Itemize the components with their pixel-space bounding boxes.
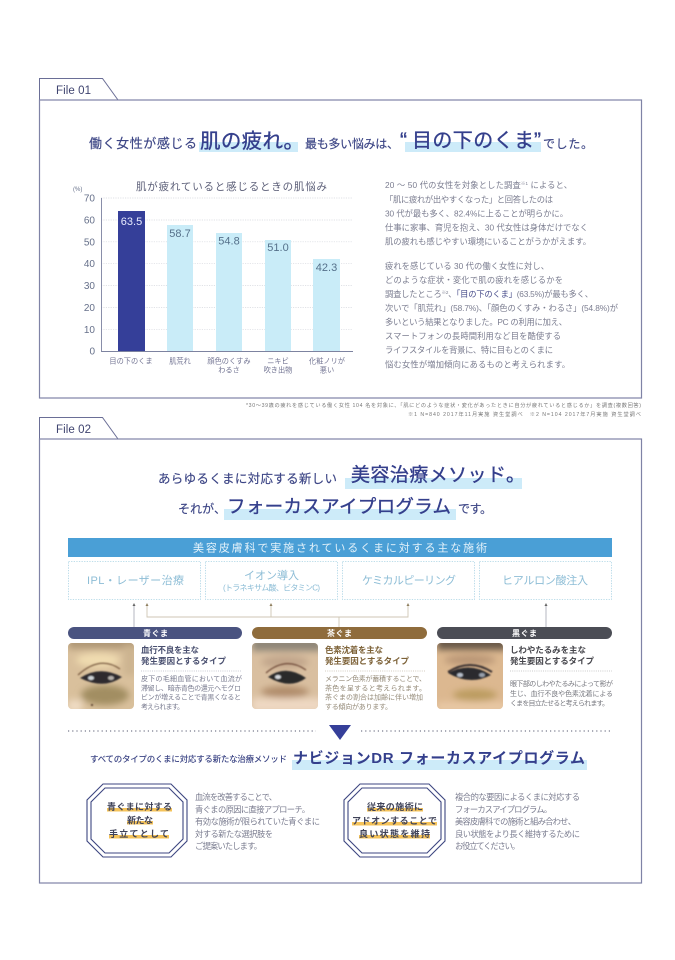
- callout: option for blue circles: [87, 784, 320, 857]
- arrow: black circles to hyaluronic acid: [544, 603, 548, 627]
- heading: 美容治療メソッド。: [351, 464, 525, 486]
- type description: くまを目立たせると考えられます。: [510, 698, 609, 708]
- text block: survey explanation: 多いという結果となりました。PC の利用に加え、: [385, 317, 567, 327]
- footnotes: ※1 N=840 2017年11月実施 資生堂調べ ※2 N=104 2017年7月実施 資生堂調べ: [408, 410, 641, 418]
- text block: survey explanation: スマートフォンの長時間利用など目を酷使する: [385, 331, 561, 341]
- footnotes: [246, 401, 641, 418]
- tab: File 02: [40, 418, 118, 439]
- column: black circles: [437, 627, 613, 712]
- treatment box: hyaluronic acid: ヒアルロン酸注入: [502, 573, 588, 587]
- text block: survey explanation: 30 代が最も多く、82.4%に上ることが明らかに。: [385, 208, 568, 218]
- heading: ”: [534, 129, 541, 152]
- callout text: 複合的な要因によるくまに対応する: [455, 792, 580, 802]
- type title: [510, 645, 594, 666]
- arrow: blue circles to IPL: [132, 603, 136, 627]
- callout text: 青ぐまの原因に直接アプローチ。: [195, 804, 310, 814]
- badge text: 手立てとして: [109, 828, 169, 839]
- heading: 働く女性が感じる: [89, 136, 197, 151]
- label pill: [252, 627, 427, 639]
- y axis labels: [84, 194, 95, 358]
- bar values: [121, 216, 337, 274]
- type description: 眼下部のしわやたるみによって影が: [510, 679, 613, 688]
- text block: survey explanation: ライフスタイルを背景に、特に目もとのくまに: [385, 345, 553, 355]
- callout: add-on to existing treatments: [344, 784, 580, 857]
- panel frame: [40, 100, 642, 398]
- callout text: [195, 792, 320, 851]
- panel: File 02: [40, 418, 642, 883]
- heading: “: [400, 129, 407, 152]
- y axis labels: 0: [89, 347, 95, 358]
- treatment box: iontophoresis: (トラネキサム酸、ビタミンC): [223, 582, 320, 592]
- type description: メラニン色素が蓄積することで、: [325, 674, 426, 683]
- treatment header bar: [68, 538, 612, 557]
- category labels: 吹き出物: [264, 366, 292, 374]
- text block: survey explanation: ※2: [442, 290, 449, 295]
- text block: survey explanation: 悩む女性が増加傾向にあるものと考えられます。: [385, 360, 570, 370]
- y axis labels: 50: [84, 237, 95, 248]
- type description: 茶色を呈すると考えられます。: [325, 683, 426, 692]
- category labels: 肌荒れ: [169, 356, 191, 366]
- text block: survey explanation: 仕事に家事、育児を抱え、30 代女性は身体だけでなく: [385, 222, 588, 232]
- column: brown circles: [252, 627, 427, 712]
- tab: File 02: File 02: [56, 424, 91, 436]
- treatment box: iontophoresis: イオン導入: [244, 568, 299, 582]
- category labels: [109, 356, 345, 374]
- bar values: 54.8: [218, 236, 240, 248]
- badge text: 青ぐまに対する: [107, 801, 172, 812]
- type description: 茶ぐまの割合は加齢に伴い増加: [325, 693, 423, 702]
- heading: です。: [458, 502, 492, 516]
- text block: survey explanation: 20 ～ 50 代の女性を対象とした調査: [385, 180, 521, 190]
- type description: [141, 674, 242, 711]
- type description: 考えられます。: [141, 703, 184, 711]
- type description: 滞留し、暗赤青色の還元ヘモグロ: [141, 683, 241, 692]
- category labels: わるさ: [218, 366, 240, 374]
- infographic page: [38, 78, 642, 884]
- photo: eye with blue circle: [68, 643, 134, 709]
- treatment box: chemical peeling: ケミカルピーリング: [362, 573, 456, 587]
- badge text: 良い状態を維持: [359, 828, 430, 839]
- badge text: [352, 801, 437, 839]
- heading: あらゆるくまに対応する新しい: [158, 472, 337, 486]
- callout text: フォーカスアイプログラム。: [455, 804, 552, 814]
- panel: File 01: [40, 78, 642, 398]
- chart title: 肌が疲れていると感じるときの肌悩み: [136, 180, 327, 193]
- bar values: 63.5: [121, 216, 142, 228]
- type title: 発生要因とするタイプ: [141, 656, 226, 666]
- program heading: [90, 749, 587, 770]
- treatment box: hyaluronic acid: [480, 562, 612, 600]
- photo: eye with black circle: [437, 643, 503, 709]
- unit label: (%): [73, 187, 82, 193]
- label pill: [437, 627, 612, 639]
- footnotes: *30～39歳の疲れを感じている働く女性 104 名を対象に、「肌にどのような症状・変化があったときに自分が疲れていると感じるか」を調査(複数回答): [246, 401, 641, 409]
- label pill: [68, 627, 242, 639]
- treatment header bar: 美容皮膚科で実施されているくまに対する主な施術: [193, 540, 487, 554]
- text block: survey explanation: どのような症状・変化で肌の疲れを感じるかを: [385, 275, 563, 285]
- category labels: 顔色のくすみ: [207, 356, 251, 366]
- bar values: 42.3: [316, 262, 337, 274]
- tab: File 01: File 01: [56, 85, 91, 97]
- arrows: brown circles to treatments: [146, 603, 410, 627]
- type description: [325, 674, 426, 711]
- badge text: アドオンすることで: [352, 816, 437, 826]
- type description: ビンが増えることで青黒くなると: [141, 693, 241, 702]
- program heading: ナビジョンDR フォーカスアイプログラム: [293, 749, 585, 767]
- label pill: 茶ぐま: [327, 628, 352, 638]
- treatment box: iontophoresis: [206, 562, 338, 600]
- type title: 色素沈着を主な: [325, 645, 383, 655]
- type description: 生じ、血行不良や色素沈着による: [510, 689, 613, 698]
- y axis labels: 40: [84, 259, 95, 270]
- type title: 発生要因とするタイプ: [325, 656, 409, 666]
- label pill: 黒ぐま: [512, 629, 537, 638]
- text block: survey explanation: 次いで「肌荒れ」(58.7%)、「顔色のくすみ・わるさ」(54.8%)が: [385, 303, 619, 313]
- tab: File 01: [40, 78, 118, 100]
- text block: survey explanation: ※1: [521, 181, 528, 186]
- y axis labels: 30: [84, 281, 95, 292]
- heading: 肌の疲れ。: [200, 130, 304, 153]
- text block: survey explanation: 肌の疲れも感じやすい環境にいることがうかがえます。: [385, 236, 591, 246]
- photo: eye with brown circle: [252, 643, 318, 709]
- category labels: 化粧ノリが: [309, 356, 345, 366]
- axes: [102, 198, 353, 352]
- program heading: すべてのタイプのくまに対応する新たな治療メソッド: [90, 754, 287, 764]
- y axis labels: 20: [84, 303, 95, 314]
- heading: [158, 464, 525, 520]
- text block: survey explanation: 「目の下のくま」(63.5%)が最も多く、: [456, 289, 593, 299]
- callout text: お役立てください。: [455, 841, 520, 851]
- heading: [89, 129, 593, 153]
- callout text: 有効な施術が限られていた青ぐまに: [195, 816, 320, 826]
- type title: [141, 645, 226, 666]
- treatment box: IPL: [68, 562, 200, 600]
- callout text: 血流を改善することで、: [195, 792, 277, 802]
- badge: double octagon: [344, 784, 445, 857]
- callout text: [455, 792, 580, 851]
- y axis labels: 70: [84, 194, 95, 204]
- type title: 血行不良を主な: [141, 645, 199, 655]
- label pill: 青ぐま: [143, 628, 168, 638]
- type title: 発生要因とするタイプ: [510, 656, 594, 666]
- callout text: 対する新たな選択肢を: [195, 829, 273, 839]
- badge: double octagon: [87, 784, 187, 857]
- heading: 最も多い悩みは、: [305, 137, 399, 151]
- y axis labels: 10: [84, 325, 95, 336]
- heading: フォーカスアイプログラム: [227, 496, 451, 517]
- callout text: ご提案いたします。: [195, 841, 262, 851]
- text block: survey explanation: 疲れを感じている 30 代の働く女性に対し、: [385, 261, 549, 271]
- bar values: 51.0: [267, 242, 289, 254]
- callout text: 良い状態をより長く維持するために: [455, 829, 580, 839]
- text block: survey explanation: 「肌に疲れが出やすくなった」と回答したのは: [385, 194, 553, 204]
- badge text: 従来の施術に: [367, 801, 423, 812]
- treatment box: IPL: IPL・レーザー治療: [87, 573, 184, 587]
- divider with down arrow: [68, 725, 612, 740]
- bar values: 58.7: [169, 228, 191, 240]
- heading: それが、: [178, 501, 226, 516]
- type title: [325, 645, 409, 666]
- text block: survey explanation: 、: [448, 289, 456, 299]
- text block: survey explanation: によると、: [528, 180, 572, 190]
- category labels: 悪い: [320, 366, 334, 374]
- heading: 目の下のくま: [412, 130, 534, 152]
- y axis labels: 60: [84, 216, 95, 226]
- badge text: [107, 801, 172, 839]
- type description: [510, 679, 613, 708]
- badge text: 新たな: [127, 814, 153, 826]
- treatment box: chemical peeling: [342, 562, 474, 600]
- bar chart: skin concerns: [73, 180, 353, 374]
- category labels: ニキビ: [267, 356, 289, 366]
- bars: [118, 211, 340, 351]
- icon: down triangle: [329, 725, 351, 740]
- type description: する傾向があります。: [325, 702, 392, 711]
- text block: survey explanation: 調査したところ: [385, 289, 442, 299]
- category labels: 目の下のくま: [109, 356, 153, 366]
- panel frame: [40, 439, 642, 883]
- heading: でした。: [543, 137, 593, 151]
- type title: しわやたるみを主な: [510, 645, 586, 655]
- column: blue circles: [68, 627, 242, 712]
- type description: 皮下の毛細血管において血流が: [141, 674, 242, 683]
- text block: survey explanation: [385, 180, 619, 370]
- callout text: 美容皮膚科での施術と組み合わせ、: [455, 816, 576, 826]
